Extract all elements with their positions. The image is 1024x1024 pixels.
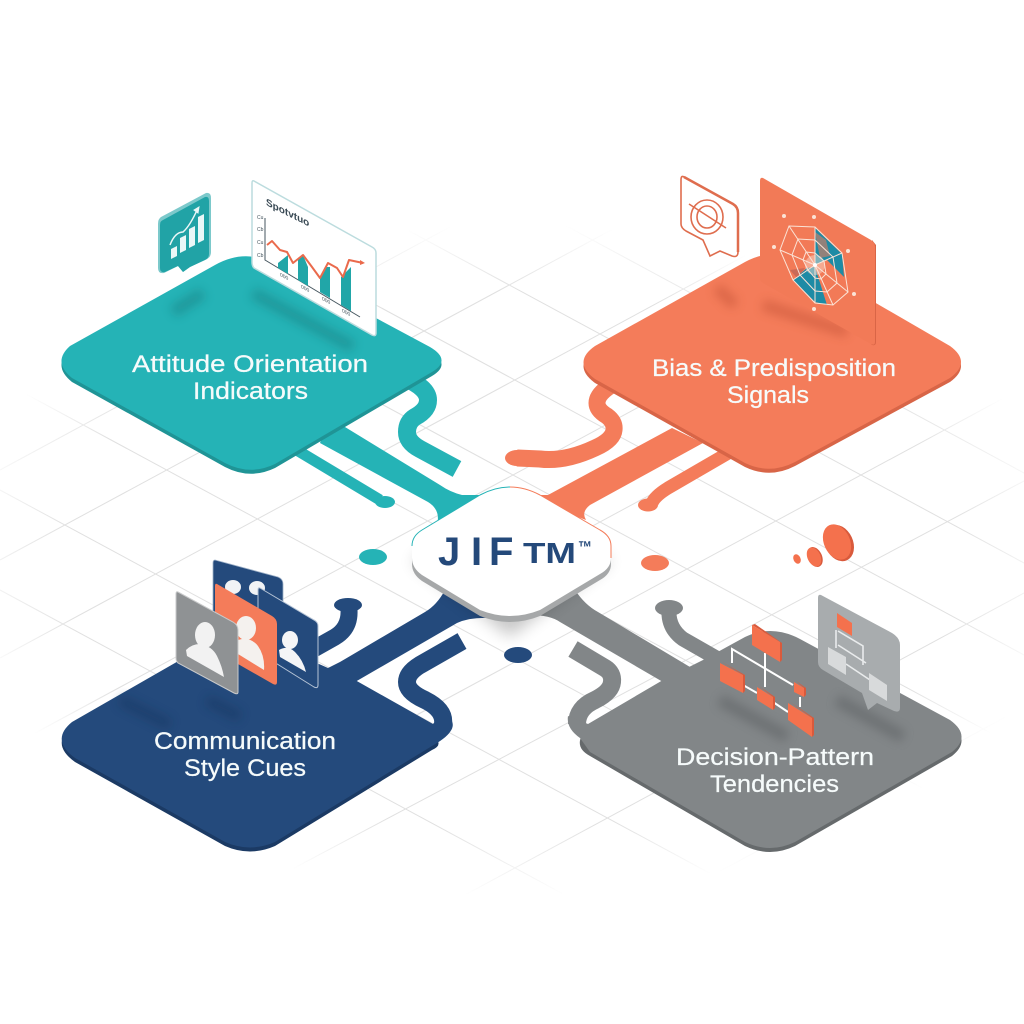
axis labels: 000 bbox=[280, 272, 288, 282]
label: decision-pattern tendencies: Decision-Pattern bbox=[676, 744, 874, 771]
label: attitude orientation indicators: Indicators bbox=[193, 378, 308, 405]
axis labels: 000 bbox=[301, 284, 309, 294]
axis labels: Cu bbox=[257, 215, 264, 221]
icon: growth chart bubble bbox=[158, 193, 211, 273]
label: bias and predisposition signals: Signals bbox=[727, 382, 809, 409]
chart title: Spotvtuo bbox=[266, 197, 310, 230]
radar chart card bbox=[760, 178, 876, 345]
panel: communication style cues bbox=[62, 560, 500, 852]
platform surface: navy bbox=[62, 632, 453, 848]
platform surface: coral bbox=[584, 254, 961, 469]
platform surface: teal bbox=[61, 256, 442, 470]
label: decision-pattern tendencies: Tendencies bbox=[710, 771, 839, 798]
label: attitude orientation indicators: Attitude Orientation bbox=[132, 351, 368, 378]
dot: navy bbox=[504, 647, 532, 663]
logo text: TM bbox=[523, 538, 576, 570]
axis labels: 000 bbox=[322, 296, 330, 306]
central hexagon badge bbox=[412, 487, 611, 637]
label: attitude orientation indicators bbox=[132, 351, 368, 405]
icon: profile cards bbox=[176, 560, 318, 694]
icon: flowchart bubble bbox=[818, 595, 900, 712]
axis labels: Cb bbox=[257, 227, 264, 233]
icon: target bubble bbox=[681, 176, 738, 256]
axis labels: 000 bbox=[342, 308, 350, 318]
connectors: grey bbox=[520, 590, 718, 724]
axis labels bbox=[257, 215, 350, 318]
label: communication style cues: Style Cues bbox=[184, 755, 306, 782]
middle navy card bbox=[258, 588, 318, 688]
logo text bbox=[438, 530, 592, 574]
infographic canvas bbox=[0, 176, 1024, 878]
dot: coral bbox=[641, 555, 669, 571]
radar web bbox=[772, 214, 856, 311]
logo text: JIF bbox=[438, 530, 513, 574]
label: bias and predisposition signals bbox=[652, 355, 896, 409]
chart card bbox=[252, 181, 376, 336]
label: communication style cues bbox=[154, 728, 336, 782]
label: communication style cues: Communication bbox=[154, 728, 336, 755]
axis labels: Cb bbox=[257, 253, 264, 259]
label: bias and predisposition signals: Bias & Predisposition bbox=[652, 355, 896, 382]
back navy card bbox=[213, 560, 283, 640]
trend line bbox=[267, 241, 363, 278]
connectors: coral bbox=[505, 383, 730, 520]
dot: teal bbox=[359, 549, 387, 565]
platform surface: grey bbox=[568, 631, 962, 848]
decorative floating dots: coral bbox=[792, 520, 860, 569]
connectors: teal bbox=[295, 378, 490, 525]
panel: bias and predisposition signals bbox=[505, 176, 961, 520]
connectors: navy bbox=[312, 590, 500, 724]
icon: flowchart bbox=[720, 624, 814, 737]
coral card bbox=[215, 584, 277, 685]
panel: decision-pattern tendencies bbox=[520, 590, 962, 852]
bars bbox=[278, 255, 351, 311]
grey card bbox=[176, 592, 238, 694]
label: decision-pattern tendencies bbox=[676, 744, 874, 798]
panel: attitude orientation indicators bbox=[61, 181, 490, 525]
axis labels: Cu bbox=[257, 240, 264, 246]
logo text: ™ bbox=[578, 538, 592, 557]
